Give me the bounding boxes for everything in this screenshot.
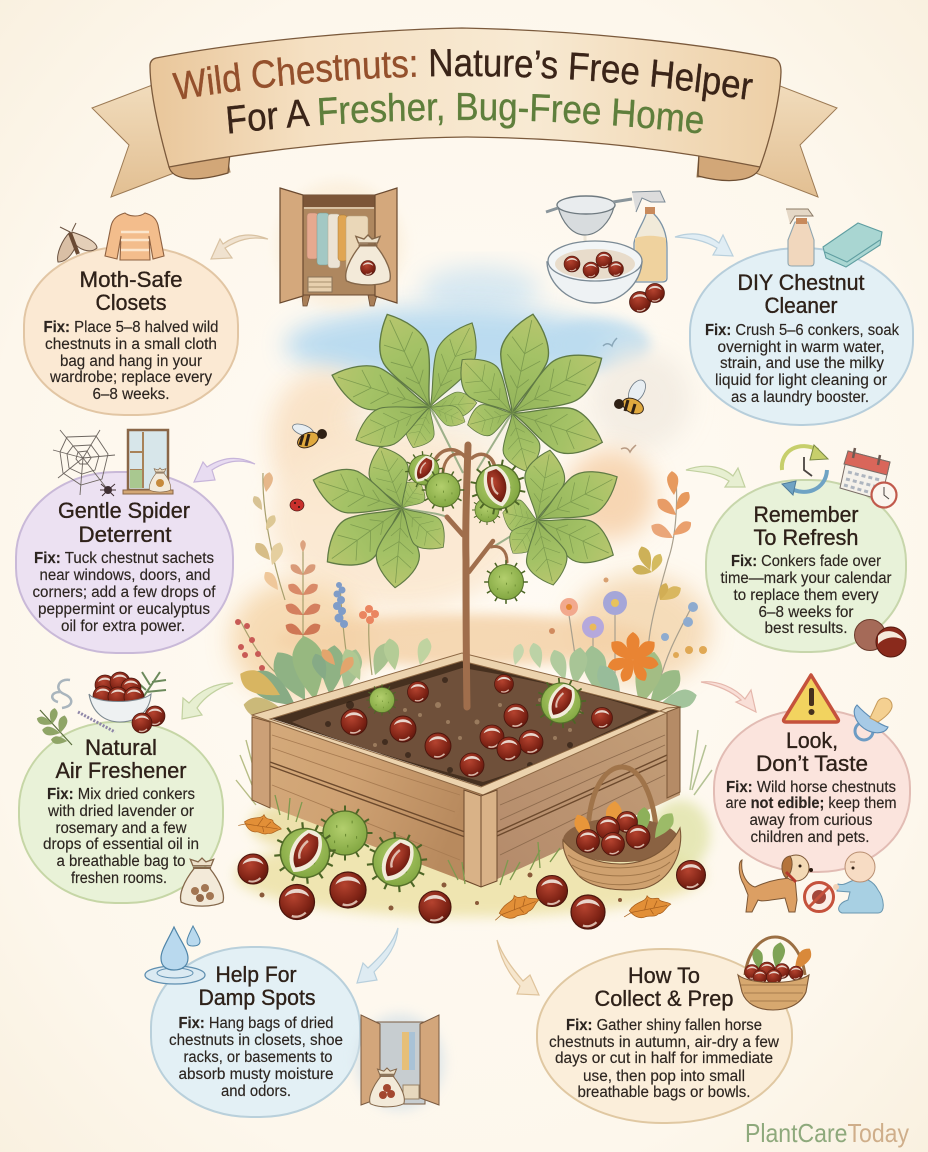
icon: steam (52, 680, 71, 708)
heading: Natural (85, 735, 157, 760)
title banner (91, 27, 838, 198)
soil (270, 660, 667, 787)
icon: lavender (78, 712, 115, 732)
heading: Closets (96, 290, 166, 315)
body text: Fix: Wild horse chestnuts (726, 779, 901, 796)
body text: as a laundry booster. (731, 389, 869, 406)
heading: Don’t Taste (756, 751, 868, 776)
heading: Look, (786, 728, 838, 753)
heading: How To (628, 963, 700, 988)
bed soil chestnuts (341, 670, 612, 777)
icon: chestnut pair (854, 620, 906, 657)
arrow: tree to spider panel (194, 458, 255, 482)
leaf cluster middle left (307, 440, 455, 590)
icon: wardrobe with clothes (276, 181, 404, 309)
icon: left bee (291, 422, 327, 451)
icon: rosemary (135, 672, 166, 702)
panel: help for damp spots (145, 926, 444, 1117)
icon: baby (833, 852, 883, 913)
body text: Fix: Gather shiny fallen horse (566, 1017, 769, 1034)
burs on tree (399, 445, 533, 604)
ground wash (235, 800, 710, 917)
tree with leaves and burs (307, 304, 627, 707)
arrow: tree to collect and prep (497, 940, 539, 995)
icon: damp closet (356, 1014, 444, 1110)
icon: right bee (614, 377, 649, 417)
title line 1: Wild Chestnuts: Nature’s Free Helper (172, 49, 753, 102)
arrow: tree to air freshener (182, 683, 233, 719)
trunk and branches (434, 445, 507, 707)
harvest basket beside bed (563, 767, 681, 890)
icon: strainer, bowl and spray bottle (546, 191, 667, 312)
body text: 6–8 weeks for (758, 604, 854, 621)
body text: breathable bags or bowls. (578, 1084, 750, 1101)
panel: gentle spider deterrent (16, 430, 233, 653)
rim boards (252, 653, 680, 795)
body text: time—mark your calendar (720, 570, 892, 587)
body text: Fix: Crush 5–6 conkers, soak (705, 322, 907, 339)
icon: basket (738, 937, 815, 1010)
body text: and odors. (221, 1083, 291, 1100)
heading: DIY Chestnut (738, 270, 864, 295)
heading: Cleaner (764, 293, 838, 318)
body text: bag and hang in your (60, 353, 202, 370)
heading: Deterrent (78, 522, 172, 547)
icon: calendar with clock (840, 448, 896, 508)
title line 2: For A Fresher, Bug-Free Home (227, 92, 703, 134)
heading: Remember (754, 502, 858, 527)
icon: sachet (181, 858, 223, 906)
icon: bowl of chestnuts (89, 672, 165, 733)
brand wordmark: PlantCareToday (745, 1118, 909, 1148)
body text: liquid for light cleaning or (715, 372, 887, 389)
heading: Air Freshener (56, 758, 186, 783)
icon: ladybug (290, 499, 304, 511)
body text: Fix: Mix dried conkers (47, 786, 199, 803)
icon: warning triangle (784, 675, 838, 722)
leaf cluster top right (447, 309, 613, 477)
heading: To Refresh (754, 525, 858, 550)
heading: Damp Spots (198, 985, 316, 1010)
body text: peppermint or eucalyptus (38, 601, 210, 618)
body text: drops of essential oil in (43, 836, 199, 853)
icon: folded towel (823, 223, 882, 267)
body text: Fix: Conkers fade over (731, 553, 888, 570)
left ribbon tail (92, 84, 230, 197)
watercolor background wash (230, 266, 710, 700)
icon: clock arrows (782, 445, 828, 495)
icon: no-eating sign (804, 882, 834, 912)
body text: oil for extra power. (61, 618, 185, 635)
arrow: wardrobe to moth closets (211, 235, 268, 259)
main ribbon (150, 28, 781, 167)
body text: Fix: Place 5–8 halved wild (44, 319, 224, 336)
panel: look, don't taste (714, 675, 910, 913)
body text: corners; add a few drops of (32, 584, 216, 601)
body text: freshen rooms. (71, 870, 167, 887)
body text: 6–8 weeks. (92, 386, 170, 403)
body text: Fix: Tuck chestnut sachets (34, 550, 218, 567)
body text: best results. (764, 620, 848, 637)
body text: rosemary and a few (56, 820, 187, 837)
body text: to replace them every (734, 587, 879, 604)
body text: strain, and use the milky (720, 355, 884, 372)
corner posts (464, 790, 497, 887)
heading: Help For (216, 962, 296, 987)
right wall (480, 707, 680, 887)
body text: wardrobe; replace every (49, 369, 212, 386)
body text: chestnuts in autumn, air-dry a few (549, 1034, 780, 1051)
arrow: tree to remember panel (686, 466, 745, 487)
body text: with dried lavender or (47, 803, 194, 820)
arrow: tree to look panel (701, 682, 756, 712)
icon: herb sprig (36, 708, 72, 745)
body text: overnight in warm water, (718, 339, 884, 356)
icon: sweater (105, 213, 164, 260)
body text: are not edible; keep them (726, 795, 901, 812)
right ribbon tail (697, 84, 837, 197)
leaf cluster top left (325, 304, 489, 458)
heading: Moth-Safe (80, 267, 182, 292)
arrow: tree to damp spots (357, 928, 398, 983)
panel: moth-safe closets (24, 213, 238, 415)
panel: natural air freshener (19, 672, 223, 906)
panel: how to collect and prep (537, 937, 815, 1123)
arrow: tree to DIY cleaner (675, 234, 733, 256)
body text: absorb musty moisture (178, 1066, 334, 1083)
body text: a breathable bag to (56, 853, 186, 870)
panel: remember to refresh (706, 445, 906, 657)
raised wooden bed (252, 653, 680, 887)
body text: use, then pop into small (583, 1068, 745, 1085)
petioles (402, 407, 537, 547)
icon: birds (603, 338, 636, 452)
icon: water drops (145, 926, 205, 984)
icon: small spider (100, 484, 116, 496)
icon: spider web (53, 430, 115, 495)
body text: chestnuts in closets, shoe (169, 1032, 343, 1049)
icon: moth (58, 223, 97, 262)
wildflower meadow left (235, 471, 434, 805)
wildflower meadow right (510, 471, 712, 795)
body text: away from curious (750, 812, 873, 829)
fallen chestnuts and burs (238, 806, 706, 929)
body text: Fix: Hang bags of dried (178, 1015, 340, 1032)
body text: chestnuts in a small cloth (45, 336, 217, 353)
panel: DIY chestnut cleaner (690, 209, 913, 425)
left wall (252, 715, 480, 887)
heading: Collect & Prep (594, 986, 734, 1011)
heading: Gentle Spider (58, 498, 190, 523)
icon: spray bottle (786, 209, 814, 266)
icon: pacifier (854, 698, 892, 740)
leaf cluster middle right (499, 447, 627, 590)
body text: days or cut in half for immediate (555, 1050, 773, 1067)
body text: near windows, doors, and (40, 567, 210, 584)
body text: children and pets. (750, 829, 870, 846)
body text: racks, or basements to (184, 1049, 332, 1066)
icon: window with sachet (123, 430, 173, 494)
icon: puppy (739, 855, 813, 912)
grass tufts (275, 795, 560, 885)
